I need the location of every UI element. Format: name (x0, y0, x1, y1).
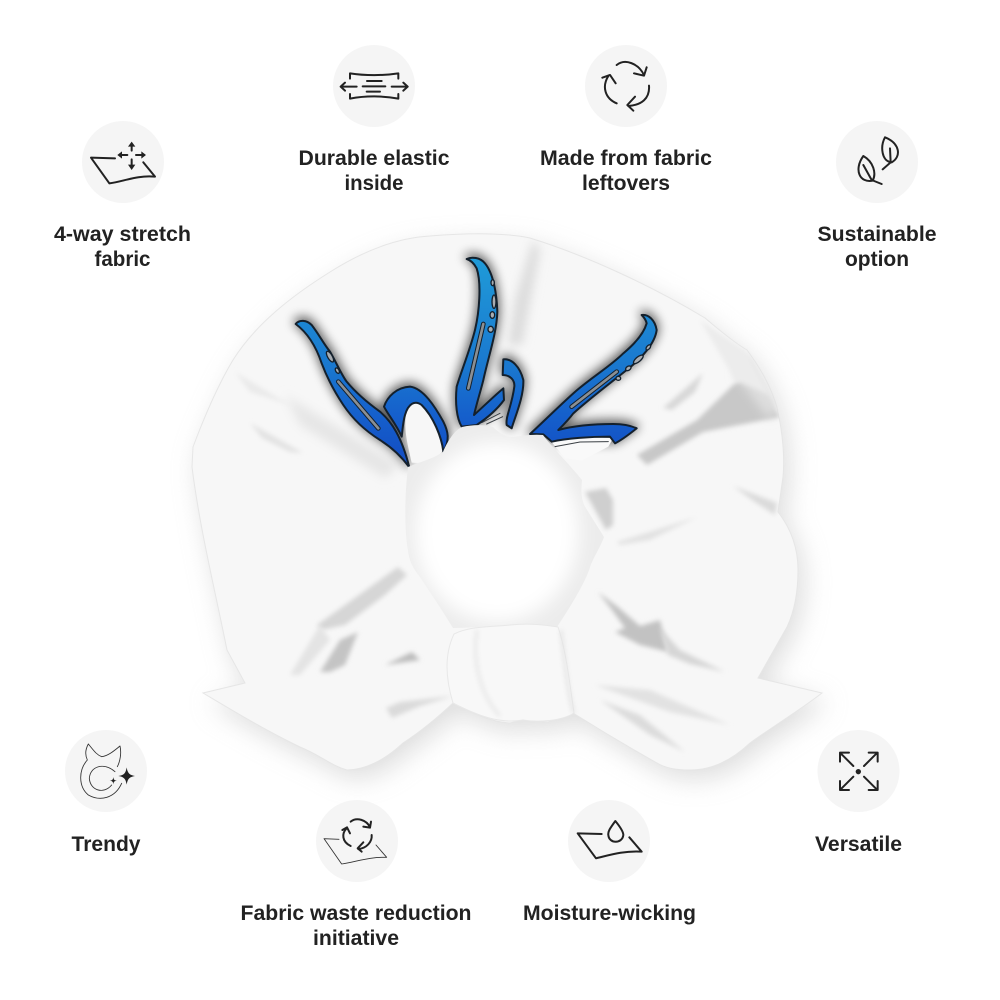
feature: trendy (65, 730, 147, 856)
center hole of scrunchie (405, 425, 604, 628)
right stroke (530, 315, 657, 443)
dark ink streaks (397, 413, 613, 447)
feature: moisture-wicking (523, 800, 696, 925)
label: 4-way stretch (54, 223, 191, 246)
label: Sustainable (818, 223, 936, 246)
blue lettering on fabric (296, 256, 657, 467)
icon circle (568, 800, 650, 882)
label: Moisture-wicking (523, 902, 696, 925)
label: Made from fabric (540, 147, 712, 170)
icon: two leaves (858, 137, 898, 184)
label: option (845, 248, 909, 271)
feature: versatile (815, 730, 902, 856)
left stroke (296, 321, 409, 467)
hump stroke (384, 387, 448, 452)
label (818, 223, 936, 271)
label: Fabric waste reduction (240, 902, 472, 925)
lettering drop shadow (296, 256, 657, 465)
icon: water drop on fabric (578, 821, 642, 858)
label: Versatile (815, 833, 902, 856)
label (298, 147, 450, 195)
icon circle (316, 800, 398, 882)
center stroke (456, 258, 504, 427)
icon circle (818, 730, 900, 812)
bow knot (447, 624, 574, 721)
feature: fabric waste reduction initiative (240, 800, 472, 950)
label (240, 902, 472, 950)
ground shadow (198, 243, 828, 779)
feature: made from fabric leftovers (540, 45, 712, 195)
label: Trendy (72, 833, 141, 856)
white fabric inside hump (405, 403, 443, 463)
icon: four outward arrows (840, 753, 878, 790)
fabric folds and creases (235, 240, 780, 752)
icon: stretch arrows on fabric (91, 142, 155, 183)
label: inside (344, 172, 404, 195)
scrunchie fabric body (192, 234, 822, 770)
label: leftovers (582, 172, 670, 195)
icon circle (585, 45, 667, 127)
icon: elastic band (341, 73, 408, 99)
grey stripes inside strokes (338, 324, 617, 428)
feature: sustainable option (818, 121, 936, 271)
icon: recycle arrows on fabric (324, 819, 387, 864)
label (540, 147, 712, 195)
label: fabric (94, 248, 151, 271)
icon circle (333, 45, 415, 127)
icon: recycle arrows (602, 62, 649, 111)
feature: durable elastic inside (298, 45, 450, 195)
icon circle (65, 730, 147, 812)
label: Durable elastic (298, 147, 450, 170)
feature: 4-way stretch fabric (54, 121, 191, 271)
icon: cat ears ring with sparkles (81, 744, 135, 798)
small highlights along stroke edges (325, 280, 652, 380)
icon circle (836, 121, 918, 203)
scrunchie product photo (192, 234, 828, 779)
small hook stroke (503, 359, 523, 428)
label (54, 223, 191, 271)
white fabric under right letter (550, 435, 615, 461)
icon circle (82, 121, 164, 203)
label: initiative (313, 927, 399, 950)
